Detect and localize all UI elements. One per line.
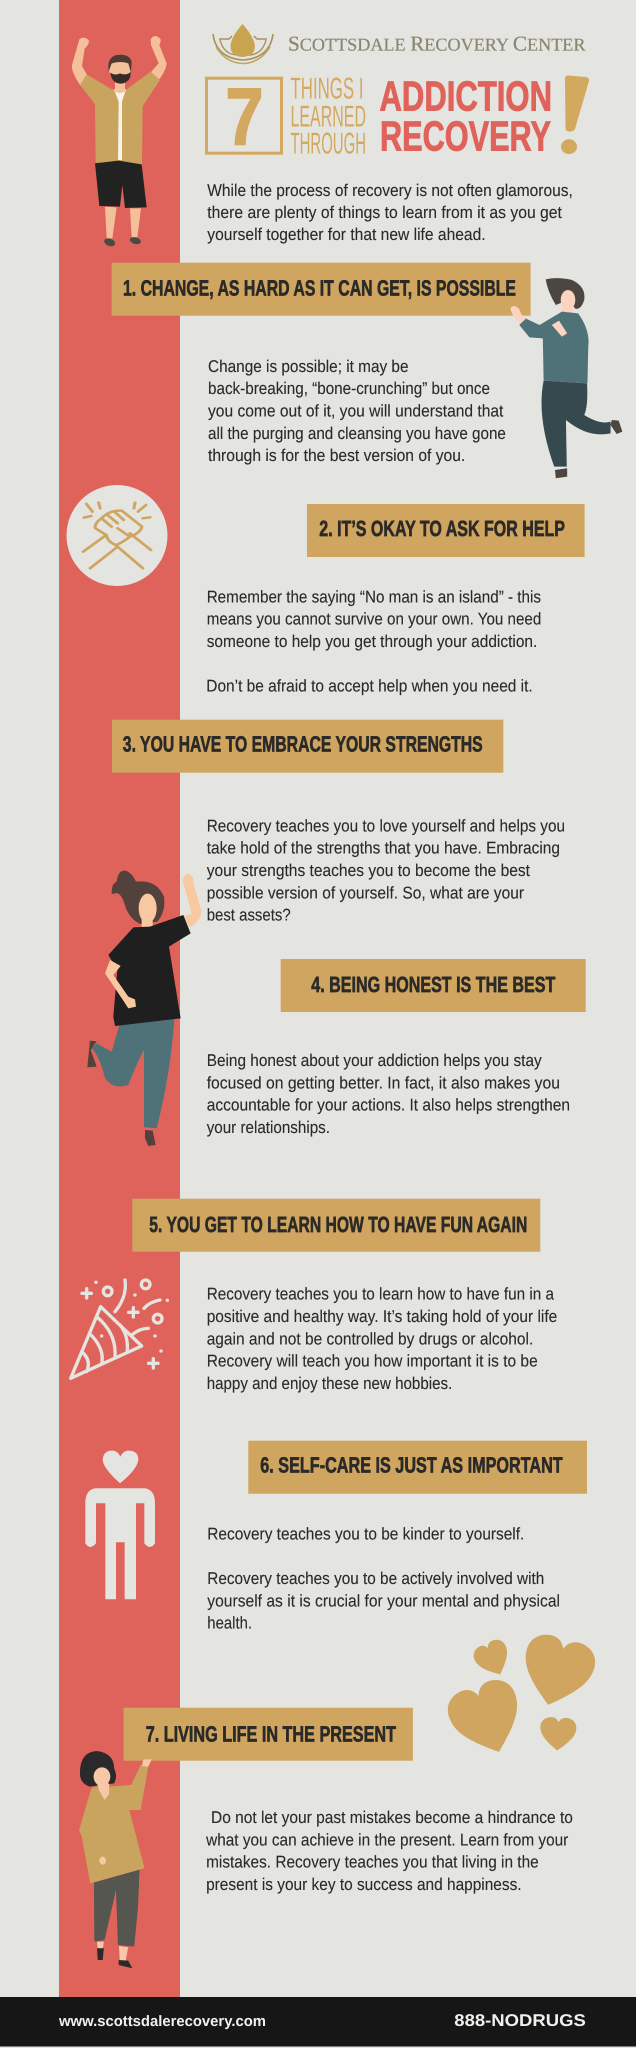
body text 4: accountable for your actions. It also helps strengthen [207,1096,570,1115]
body text 7: what you can achieve in the present. Learn from your [205,1830,569,1849]
body text 3: take hold of the strengths that you have. Embracing [207,839,560,858]
icon: person with heart [85,1451,155,1599]
intro text: there are plenty of things to learn from it as you get [207,203,562,222]
body text 2: means you cannot survive on your own. You need [207,610,541,629]
heading 5 [132,1199,540,1252]
body text 2: Don’t be afraid to accept help when you need it. [206,677,533,696]
body text 5: Recovery teaches you to learn how to have fun in a [207,1285,554,1304]
body text 7 [205,1808,573,1894]
logo wordmark: SCOTTSDALE RECOVERY CENTER [288,32,586,56]
heading 3: 3. YOU HAVE TO EMBRACE YOUR STRENGTHS [123,732,483,757]
heading 2 [307,504,585,557]
panel: section 3 [112,720,565,925]
body text 3: possible version of yourself. So, what are your [207,883,524,902]
body text 4: your relationships. [207,1118,330,1137]
body text 4: focused on getting better. In fact, it also makes you [207,1073,560,1092]
body text 7: present is your key to success and happiness. [206,1875,522,1894]
panel: section 5 [132,1199,557,1393]
title block: THROUGH [290,127,366,160]
icon: handshake in circle [66,485,168,586]
intro text: yourself together for that new life ahead. [207,225,486,244]
panel: section 6 [207,1441,587,1633]
body text 1: Change is possible; it may be [208,357,408,376]
number 7 in square frame: 7 [226,73,264,163]
panel: section 2 [206,504,585,696]
body text 2: someone to help you get through your addiction. [207,632,537,651]
body text 7: Do not let your past mistakes become a hindrance to [211,1808,573,1827]
heading 1 [112,263,531,316]
heading 4 [281,959,586,1012]
illustration: woman in teal sweater [510,278,622,478]
heading 3 [112,720,503,773]
heading 7: 7. LIVING LIFE IN THE PRESENT [146,1722,396,1747]
body text 5: Recovery will teach you how important it is to be [207,1352,538,1371]
body text 5: again and not be controlled by drugs or alcohol. [207,1329,533,1348]
body text 1: through is for the best version of you. [208,446,465,465]
red vertical stripe [59,0,180,1997]
body text 3: Recovery teaches you to love yourself and helps you [207,816,565,835]
body text 5 [207,1285,557,1393]
main title: addiction recovery: ADDICTION [380,73,552,120]
body text 6: health. [207,1614,252,1633]
main title: addiction recovery: RECOVERY [380,113,551,160]
body text 2: Remember the saying “No man is an island” - this [207,587,541,606]
heading 6 [248,1441,587,1494]
title block [206,73,589,163]
body text 3: your strengths teaches you to become the best [207,861,530,880]
logo: Scottsdale Recovery Center [213,24,586,64]
body text 3: best assets? [207,906,291,925]
panel: section 1 [112,263,622,478]
number 7 in square frame [206,73,282,163]
panel: section 4 [207,959,586,1137]
exclamation mark [561,76,589,154]
body text 6: Recovery teaches you to be kinder to yourself. [207,1524,524,1543]
body text 6: Recovery teaches you to be actively involved with [207,1569,544,1588]
body text 1 [208,357,506,465]
body text 6 [207,1524,560,1633]
illustration: woman in tan sweater [79,1751,152,1968]
body text 4 [207,1051,570,1137]
illustration: woman in black t-shirt [87,871,202,1146]
phone number: 888-NODRUGS [454,2011,586,2030]
footer bar [0,1997,636,2046]
body text 4: Being honest about your addiction helps you stay [207,1051,542,1070]
body text 3 [207,816,565,925]
panel: section 7 [124,1708,573,1894]
body text 5: happy and enjoy these new hobbies. [207,1374,452,1393]
body text 1: you come out of it, you will understand that [208,402,504,420]
decorative gold hearts [442,1630,600,1764]
subtitle: things I learned through [290,73,366,160]
subtitle: things I learned through: LEARNED [290,100,366,133]
illustration: man with raised arms [72,36,167,248]
body text 6: yourself as it is crucial for your mental and physical [207,1591,560,1610]
intro text: While the process of recovery is not often glamorous, [207,181,573,200]
body text 2 [206,587,541,696]
body text 1: back-breaking, “bone-crunching” but once [208,379,490,398]
body text 1: all the purging and cleansing you have gone [208,424,506,443]
heading 7 [124,1708,413,1761]
heading 4: 4. BEING HONEST IS THE BEST [311,972,556,997]
body text 7: mistakes. Recovery teaches you that living in the [206,1853,539,1872]
intro text [207,181,573,244]
icon: party popper confetti [71,1280,167,1378]
website url: www.scottsdalerecovery.com [58,2013,266,2030]
main title: addiction recovery [380,73,552,160]
body text 5: positive and healthy way. It’s taking hold of your life [207,1307,557,1326]
subtitle: things I learned through: THINGS I [290,73,364,106]
logo mark: golden drop and lotus [213,24,273,64]
